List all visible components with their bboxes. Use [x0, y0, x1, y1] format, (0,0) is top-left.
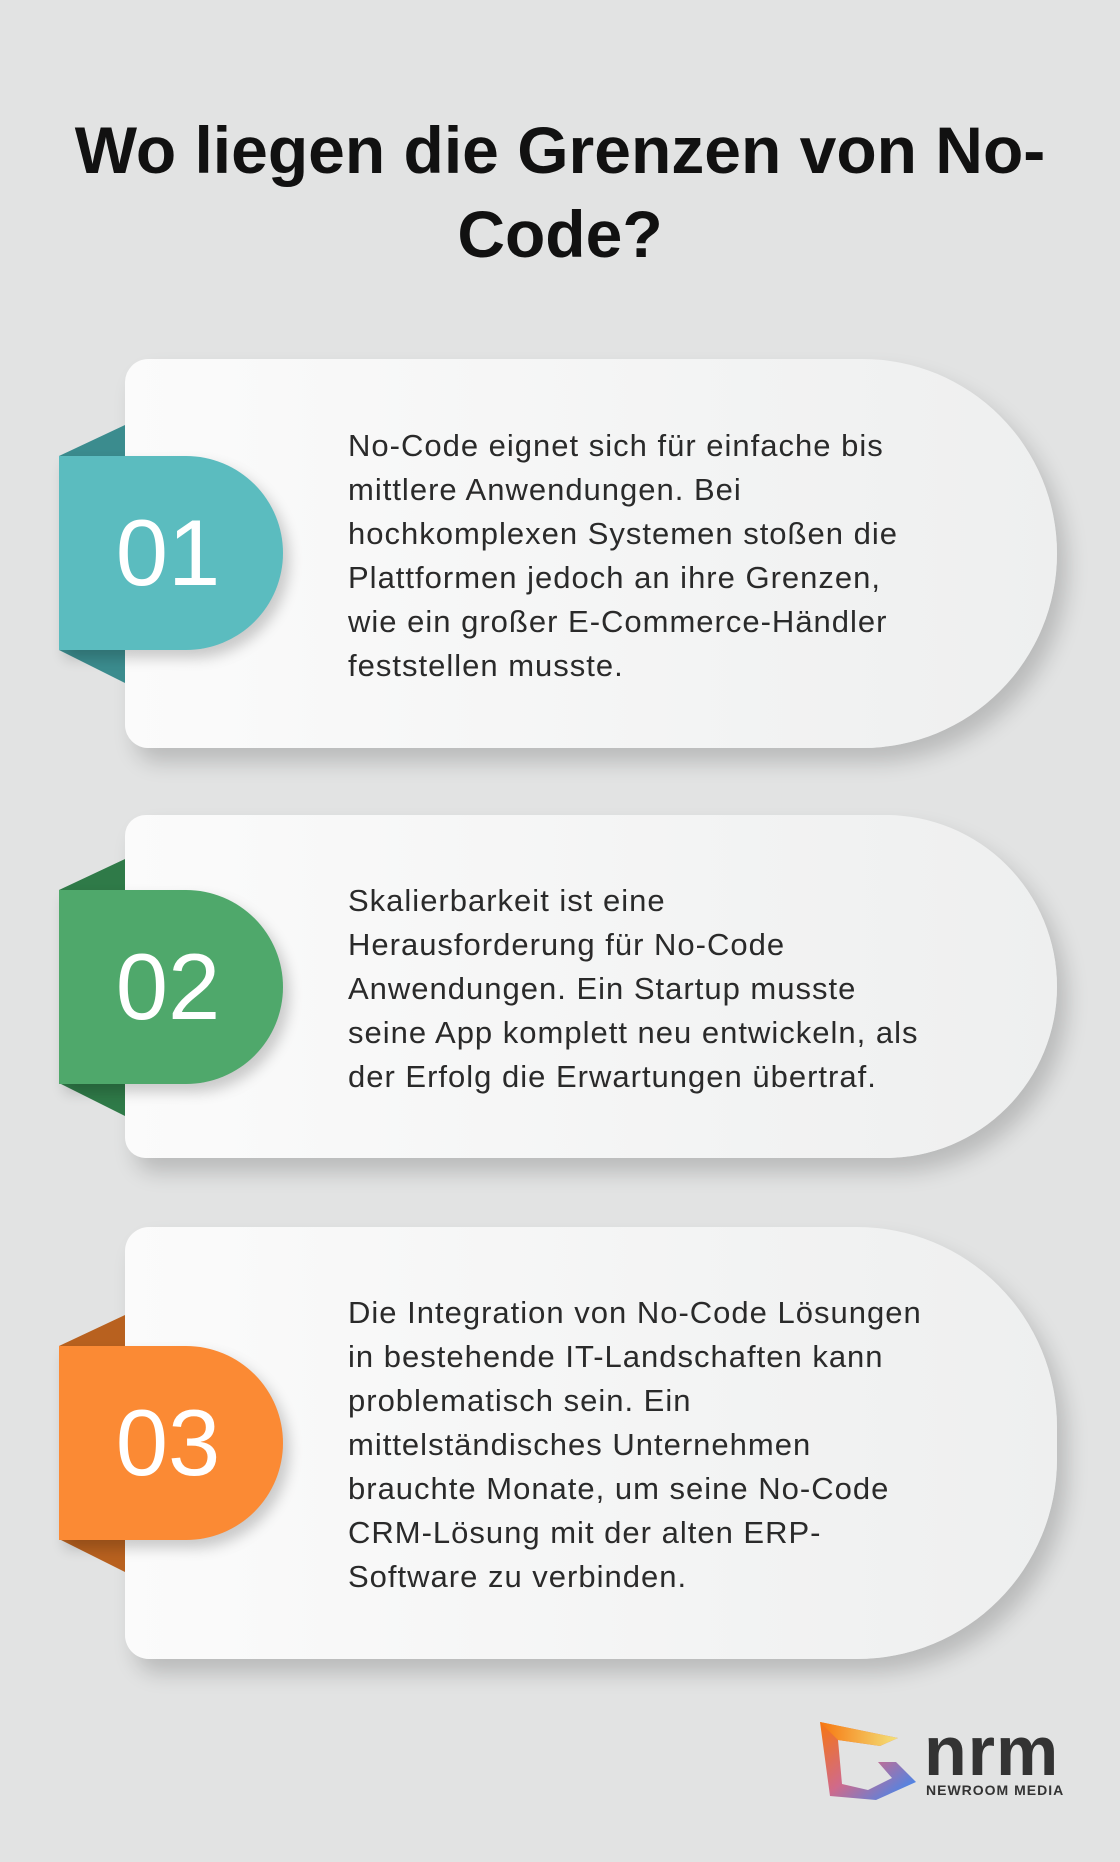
text 3 — [348, 1295, 922, 1594]
number tab 03 — [59, 1346, 283, 1540]
fold bottom 3 — [59, 1539, 125, 1572]
text 1 — [348, 428, 898, 682]
fold bottom 2 — [59, 1083, 125, 1116]
text 3: Die Integration von No-Code Lösungen — [348, 1295, 922, 1330]
text 1: Plattformen jedoch an ihre Grenzen, — [348, 560, 881, 594]
title: Code? — [457, 197, 663, 271]
logo: NEWROOM MEDIA — [926, 1782, 1064, 1798]
fold top 1 — [59, 425, 125, 456]
text 3: problematisch sein. Ein — [348, 1383, 692, 1418]
text 3: Software zu verbinden. — [348, 1559, 687, 1594]
number tab 01: 01 — [116, 500, 220, 605]
text 2 — [348, 882, 918, 1094]
logo text: nrm — [924, 1712, 1059, 1790]
logo — [820, 1712, 1064, 1800]
panel: card 1 — [125, 359, 1057, 748]
text 3: brauchte Monate, um seine No-Code — [348, 1471, 889, 1506]
text 2: Anwendungen. Ein Startup musste — [348, 970, 856, 1006]
title — [74, 113, 1045, 271]
text 2: Herausforderung für No-Code — [348, 926, 785, 962]
text 2: seine App komplett neu entwickeln, als — [348, 1014, 918, 1050]
panel: card 2 — [125, 815, 1057, 1158]
number tab 02 — [59, 890, 283, 1084]
text 1: feststellen musste. — [348, 648, 624, 682]
number tab 02: 02 — [116, 934, 220, 1039]
fold top 3 — [59, 1315, 125, 1346]
text 3: mittelständisches Unternehmen — [348, 1427, 811, 1462]
text 1: No-Code eignet sich für einfache bis — [348, 428, 884, 462]
text 2: Skalierbarkeit ist eine — [348, 882, 666, 918]
text 1: hochkomplexen Systemen stoßen die — [348, 516, 898, 550]
fold top 2 — [59, 859, 125, 890]
text 3: in bestehende IT-Landschaften kann — [348, 1339, 884, 1374]
number tab 03: 03 — [116, 1390, 220, 1495]
text 1: mittlere Anwendungen. Bei — [348, 472, 742, 506]
number tab 01 — [59, 456, 283, 650]
text 2: der Erfolg die Erwartungen übertraf. — [348, 1058, 877, 1094]
fold bottom 1 — [59, 650, 125, 683]
text 3: CRM-Lösung mit der alten ERP- — [348, 1515, 822, 1550]
icon: logo mark — [820, 1722, 916, 1800]
panel: card 3 — [125, 1227, 1057, 1659]
title: Wo liegen die Grenzen von No- — [75, 113, 1045, 187]
text 1: wie ein großer E-Commerce-Händler — [348, 604, 888, 638]
